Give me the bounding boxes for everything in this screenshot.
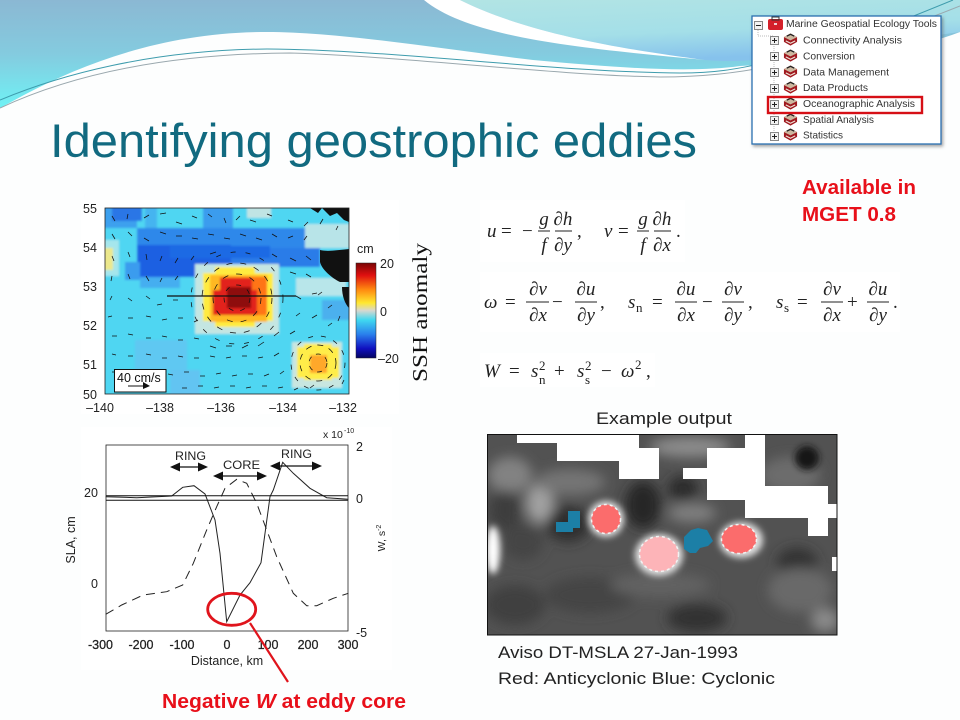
equation: vorticity and strain: ∂u xyxy=(577,279,595,300)
x axis tick labels: 200 xyxy=(298,638,318,652)
equation: Okubo-Weiss: − xyxy=(601,361,612,382)
left y axis xyxy=(64,486,98,591)
equation: Okubo-Weiss: 2 xyxy=(635,357,642,372)
right y axis: 0 xyxy=(356,492,363,506)
row: Spatial Analysis xyxy=(770,113,874,126)
x axis tick labels: -100 xyxy=(169,638,195,652)
callout text: negative W: Negative W at eddy core xyxy=(162,691,406,713)
x axis tick labels xyxy=(88,638,358,652)
equation: geostrophic velocities: f xyxy=(541,235,549,256)
equation: vorticity and strain: ω xyxy=(484,292,497,313)
row: Spatial Analysis: Spatial Analysis xyxy=(803,114,874,126)
bright streak left edge xyxy=(486,526,500,574)
equation: geostrophic velocities: ∂h xyxy=(653,209,671,230)
zero reference lines xyxy=(106,496,348,500)
colour bar: cm xyxy=(357,242,374,256)
equation: geostrophic velocities: = xyxy=(501,221,512,242)
longitude axis labels: –140 xyxy=(86,401,114,415)
equation: vorticity and strain: − xyxy=(702,292,713,313)
chart frame xyxy=(106,445,348,631)
panel: example output eddy map xyxy=(485,434,839,635)
equation: vorticity and strain: = xyxy=(652,292,663,313)
equation: vorticity and strain: , xyxy=(748,292,753,313)
SSH anomaly vertical label: SSH anomaly xyxy=(408,243,432,382)
right y axis: W, s xyxy=(376,531,388,551)
equation: Okubo-Weiss xyxy=(480,353,655,387)
equation: vorticity and strain: , xyxy=(600,292,605,313)
latitude axis labels: 51 xyxy=(83,358,97,372)
left y axis: SLA, cm xyxy=(64,516,78,564)
velocity vectors xyxy=(108,213,345,390)
dashed SLA curve xyxy=(106,479,348,614)
x axis title: Distance, km xyxy=(191,654,263,668)
equation: vorticity and strain: = xyxy=(505,292,516,313)
latitude axis labels: 55 xyxy=(83,202,97,216)
x axis tick labels: 100 xyxy=(258,638,278,652)
equation: Okubo-Weiss: 2 xyxy=(585,358,592,373)
equation: vorticity and strain: ∂x xyxy=(529,305,547,326)
equation: geostrophic velocities: v xyxy=(604,221,613,242)
map border xyxy=(488,434,837,635)
right y axis: -10 xyxy=(344,428,354,435)
equation: vorticity and strain: ∂x xyxy=(677,305,695,326)
equation: geostrophic velocities: u xyxy=(487,221,496,242)
right y axis: 2 xyxy=(356,440,363,454)
row: Statistics xyxy=(770,128,843,142)
equation: vorticity and strain: ∂u xyxy=(677,279,695,300)
equation: vorticity and strain: + xyxy=(847,292,858,313)
left y axis: 0 xyxy=(91,577,98,591)
row: Data Products xyxy=(770,81,868,94)
row: Oceanographic Analysis: Oceanographic Analysis xyxy=(803,98,915,110)
red highlight box xyxy=(768,97,922,113)
equation: vorticity and strain: s xyxy=(628,292,635,313)
equation: geostrophic velocities: g xyxy=(638,209,648,230)
panel: SSH anomaly map xyxy=(81,200,399,415)
equation: geostrophic velocities: , xyxy=(577,221,582,242)
latitude axis labels xyxy=(83,202,97,402)
glow around anticyclones xyxy=(588,501,763,576)
longitude axis labels: –134 xyxy=(269,401,297,415)
longitude axis labels: –136 xyxy=(207,401,235,415)
left y axis: 20 xyxy=(84,486,98,500)
longitude axis labels: –138 xyxy=(146,401,174,415)
equation: vorticity and strain: = xyxy=(797,292,808,313)
anticyclonic eddies xyxy=(592,504,756,572)
equation: geostrophic velocities: ∂y xyxy=(554,235,572,256)
ring and core annotations xyxy=(170,447,322,480)
equation: vorticity and strain: ∂y xyxy=(577,305,595,326)
map frame xyxy=(105,208,349,394)
equation: vorticity and strain: . xyxy=(893,292,898,313)
icon: tree root xyxy=(754,17,783,30)
right y axis: x 10 xyxy=(323,429,343,441)
latitude axis labels: 52 xyxy=(83,319,97,333)
dark spot top right xyxy=(795,446,819,470)
x axis tick labels: -200 xyxy=(128,638,154,652)
colour bar: 0 xyxy=(380,305,387,319)
right y axis: -5 xyxy=(356,626,367,640)
callout: availability: Available in xyxy=(802,177,916,199)
colour bar: 20 xyxy=(380,257,394,271)
grayscale SLA field xyxy=(485,435,839,635)
cyclonic eddies xyxy=(556,511,713,553)
callout: red ellipse and pointer xyxy=(208,593,288,682)
row: Data Management: Data Management xyxy=(803,66,889,78)
longitude axis labels: –132 xyxy=(329,401,357,415)
row: Conversion xyxy=(770,49,855,62)
land mask xyxy=(517,435,837,571)
caption: colour key: Red: Anticyclonic Blue: Cyclonic xyxy=(498,669,776,688)
latitude axis labels: 54 xyxy=(83,241,97,255)
equation: geostrophic velocities xyxy=(480,200,685,262)
tree root label: Marine Geospatial Ecology Tools xyxy=(786,18,937,30)
equation: geostrophic velocities: ∂x xyxy=(653,235,671,256)
equation: geostrophic velocities: f xyxy=(640,235,648,256)
equation: geostrophic velocities: g xyxy=(539,209,549,230)
x axis tick labels: -300 xyxy=(88,638,113,652)
equation: Okubo-Weiss: ω xyxy=(621,361,634,382)
equation: Okubo-Weiss: 2 xyxy=(539,358,546,373)
equation: Okubo-Weiss: s xyxy=(577,361,584,382)
callout: availability xyxy=(802,177,916,226)
row: Data Products: Data Products xyxy=(803,82,868,94)
x axis tick labels: 300 xyxy=(338,638,358,652)
longitude axis labels xyxy=(86,401,357,415)
equation: vorticity and strain xyxy=(480,272,900,332)
row: Statistics: Statistics xyxy=(803,130,843,142)
equation: Okubo-Weiss: , xyxy=(646,361,651,382)
velocity scale legend: 40 cm/s xyxy=(117,371,161,385)
row: Conversion: Conversion xyxy=(803,50,855,62)
ring and core annotations: RING xyxy=(281,447,312,461)
velocity scale legend xyxy=(114,370,166,392)
title: Identifying geostrophic eddies xyxy=(50,114,697,167)
equation: vorticity and strain: ∂x xyxy=(823,305,841,326)
solid W curve xyxy=(106,462,348,622)
equation: vorticity and strain: ∂v xyxy=(724,279,742,300)
panel: MGET toolbox tree xyxy=(752,16,941,144)
row: Connectivity Analysis xyxy=(770,33,902,46)
equation: vorticity and strain: ∂v xyxy=(529,279,547,300)
equation: vorticity and strain: s xyxy=(776,292,783,313)
latitude axis labels: 50 xyxy=(83,388,97,402)
row: Data Management xyxy=(770,65,889,78)
equation: Okubo-Weiss: + xyxy=(554,361,565,382)
equation: vorticity and strain: s xyxy=(784,300,789,315)
equation: Okubo-Weiss: n xyxy=(539,372,546,387)
equation: Okubo-Weiss: s xyxy=(585,372,590,387)
colour bar xyxy=(356,242,399,366)
caption: data source: Aviso DT-MSLA 27-Jan-1993 xyxy=(498,643,738,662)
ring and core annotations: RING xyxy=(175,449,206,463)
panel: W and SLA transect chart xyxy=(64,427,392,670)
map raster xyxy=(100,203,354,399)
equation: geostrophic velocities: . xyxy=(676,221,681,242)
ring and core annotations: CORE xyxy=(223,458,260,472)
callout: availability: MGET 0.8 xyxy=(802,204,896,226)
equation: vorticity and strain: ∂u xyxy=(869,279,887,300)
equation: vorticity and strain: ∂y xyxy=(724,305,742,326)
example output heading: Example output xyxy=(596,409,732,428)
equation: geostrophic velocities: ∂h xyxy=(554,209,572,230)
equation: Okubo-Weiss: W xyxy=(484,361,502,382)
equation: geostrophic velocities: − xyxy=(522,221,533,242)
row: Connectivity Analysis: Connectivity Analysis xyxy=(803,34,902,46)
equation: geostrophic velocities: = xyxy=(618,221,629,242)
colour bar: –20 xyxy=(378,352,399,366)
right y axis xyxy=(323,428,388,640)
equation: vorticity and strain: n xyxy=(636,300,643,315)
equation: vorticity and strain: ∂y xyxy=(869,305,887,326)
equation: vorticity and strain: ∂v xyxy=(823,279,841,300)
equation: Okubo-Weiss: s xyxy=(531,361,538,382)
x axis tick labels: 0 xyxy=(224,638,231,652)
islands xyxy=(310,208,349,308)
latitude axis labels: 53 xyxy=(83,280,97,294)
transect line xyxy=(167,295,296,297)
equation: vorticity and strain: − xyxy=(552,292,563,313)
right y axis: -2 xyxy=(376,525,383,531)
equation: Okubo-Weiss: = xyxy=(509,361,520,382)
